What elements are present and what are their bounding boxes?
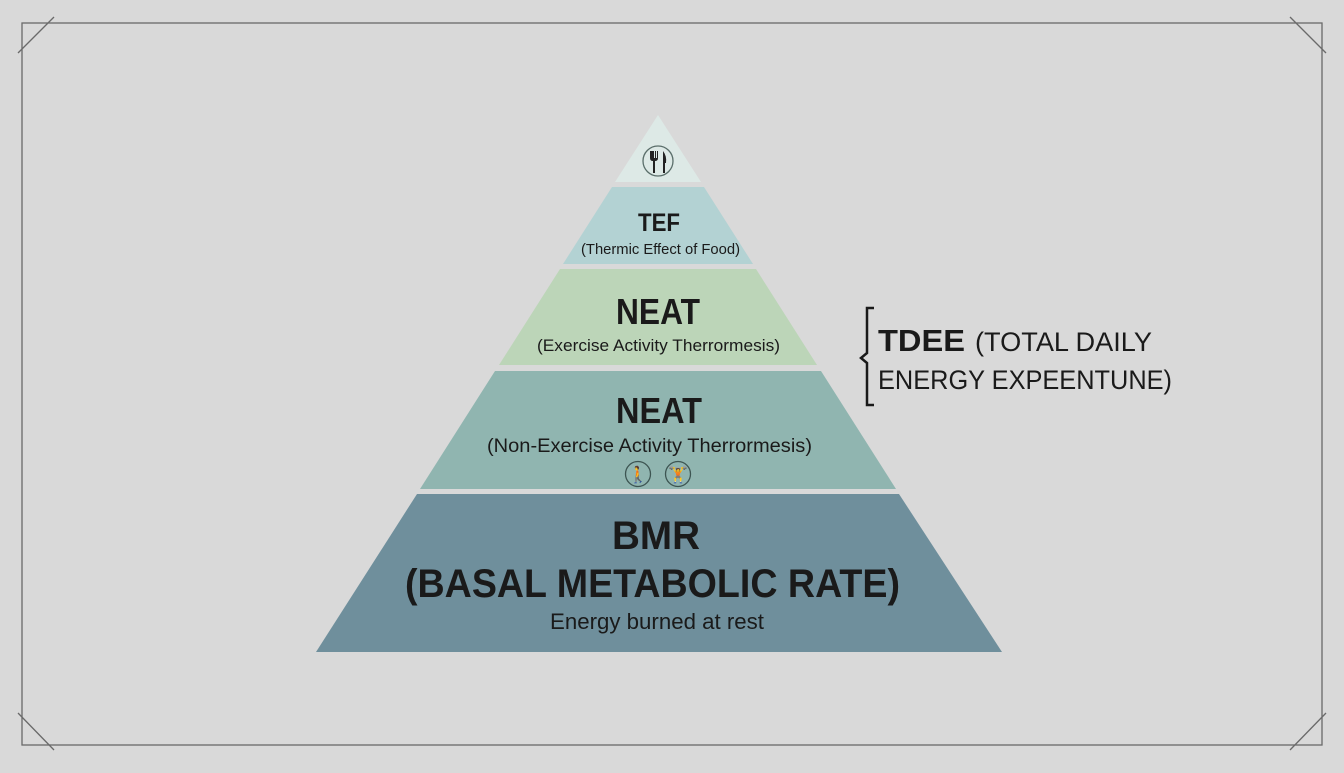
pyramid layer: TEF (563, 187, 753, 264)
pyramid layer: BMR (316, 494, 1002, 652)
icon: walking: 🚶 (628, 465, 648, 484)
pyramid layer: NEAT non-exercise: NEAT (616, 390, 702, 431)
callout: TDEE bracket and label: TDEE (878, 323, 965, 358)
pyramid layer: BMR: (BASAL METABOLIC RATE) (405, 562, 900, 606)
icon: workout (666, 462, 690, 486)
callout: TDEE bracket and label (861, 308, 1172, 405)
pyramid layer: BMR: Energy burned at rest (550, 609, 764, 634)
pyramid layer: TEF: TEF (638, 209, 680, 237)
pyramid layer: TEF: (Thermic Effect of Food) (581, 241, 740, 258)
icon: walking (626, 462, 650, 486)
pyramid layer: NEAT non-exercise: (Non-Exercise Activity Therrormesis) (487, 436, 812, 457)
icon: fork and knife (643, 146, 673, 176)
pyramid layer: NEAT exercise (499, 269, 817, 365)
callout: TDEE bracket and label: ENERGY EXPEENTUNE) (878, 365, 1172, 395)
icon: workout: 🏋 (668, 465, 688, 484)
pyramid layer: top food (615, 115, 701, 182)
pyramid layer: NEAT non-exercise (420, 371, 896, 489)
pyramid layer: NEAT exercise: NEAT (616, 291, 700, 332)
pyramid layer: BMR: BMR (612, 514, 700, 558)
pyramid layer: NEAT exercise: (Exercise Activity Therrormesis) (537, 336, 780, 355)
callout: TDEE bracket and label: (TOTAL DAILY (975, 327, 1152, 357)
